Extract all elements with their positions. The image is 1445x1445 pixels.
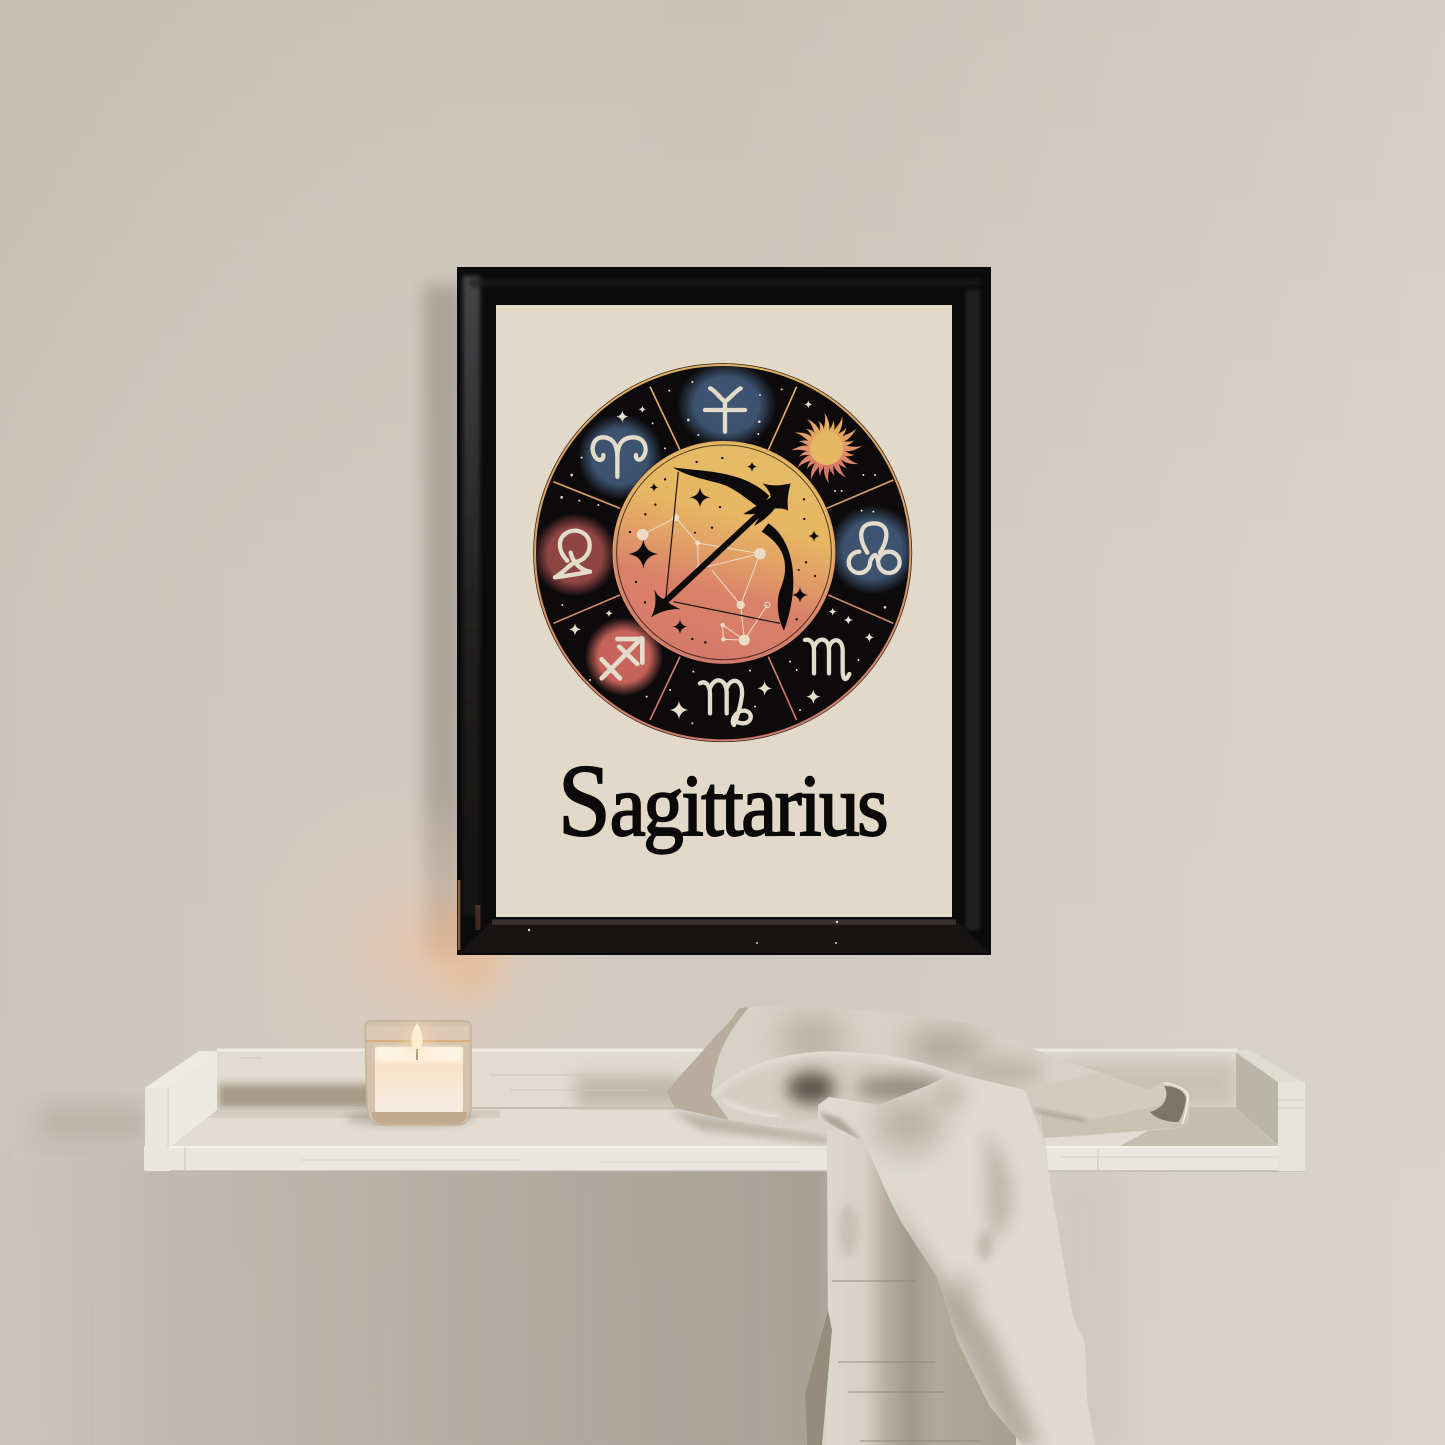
right end board: [1236, 1053, 1278, 1145]
shelf surface: [170, 1110, 1278, 1146]
icon: circle-tail sign: [555, 531, 590, 577]
colored blobs behind signs: [533, 362, 918, 696]
back board shadow band: [218, 1084, 433, 1108]
picture frame: [457, 267, 991, 955]
hump fold: [711, 1051, 954, 1118]
title: Sagittarius: [558, 744, 886, 858]
candle: [345, 1021, 475, 1127]
arrow: [651, 483, 791, 617]
draped cloth: [660, 1000, 1200, 1445]
icon: trefoil sign: [849, 523, 900, 573]
ring stars and dots: [560, 381, 886, 724]
wheel disc and ring: [534, 364, 912, 742]
upper glass: [367, 1026, 469, 1041]
constellation: [637, 515, 770, 645]
right rag: [1025, 1072, 1189, 1138]
inner medallion: [612, 441, 836, 664]
flame: [411, 1023, 423, 1049]
frame shadow on wall: [424, 285, 464, 955]
shelf back board: [217, 1050, 1237, 1110]
frame right rail: [966, 290, 980, 930]
hanging strip shading: [826, 1130, 1016, 1445]
frame left highlight: [463, 276, 480, 916]
bow string: [666, 472, 780, 623]
candle glow on wall: [235, 785, 615, 1115]
icon: scorpio sign: [805, 640, 849, 679]
zodiac wheel: [533, 362, 918, 742]
shelf: [144, 1050, 1305, 1171]
medallion stars and dots: [629, 457, 820, 643]
shelf front lip: [144, 1146, 1305, 1171]
jar base: [371, 1112, 467, 1124]
wax: [375, 1047, 463, 1112]
sector dividers: [553, 387, 893, 720]
icon: top horned sign: [705, 388, 745, 432]
icon: sagittarius sign: [602, 638, 642, 678]
bow: [673, 467, 793, 631]
cloth shadow on shelf: [670, 1110, 830, 1145]
candle shadow: [345, 1109, 475, 1127]
frame bottom rail: [459, 923, 989, 953]
glass jar: [365, 1021, 471, 1125]
back folds: [666, 1007, 749, 1120]
poster paper: [496, 305, 952, 917]
wick: [416, 1046, 418, 1060]
icon: capricorn sign: [700, 680, 751, 725]
left end board: [145, 1051, 217, 1171]
front flap: [810, 1070, 1100, 1445]
icon: sun: [791, 413, 862, 484]
icon: aries sign: [593, 437, 646, 477]
cloth body: [660, 1000, 1200, 1445]
zodiac signs: [555, 388, 900, 725]
